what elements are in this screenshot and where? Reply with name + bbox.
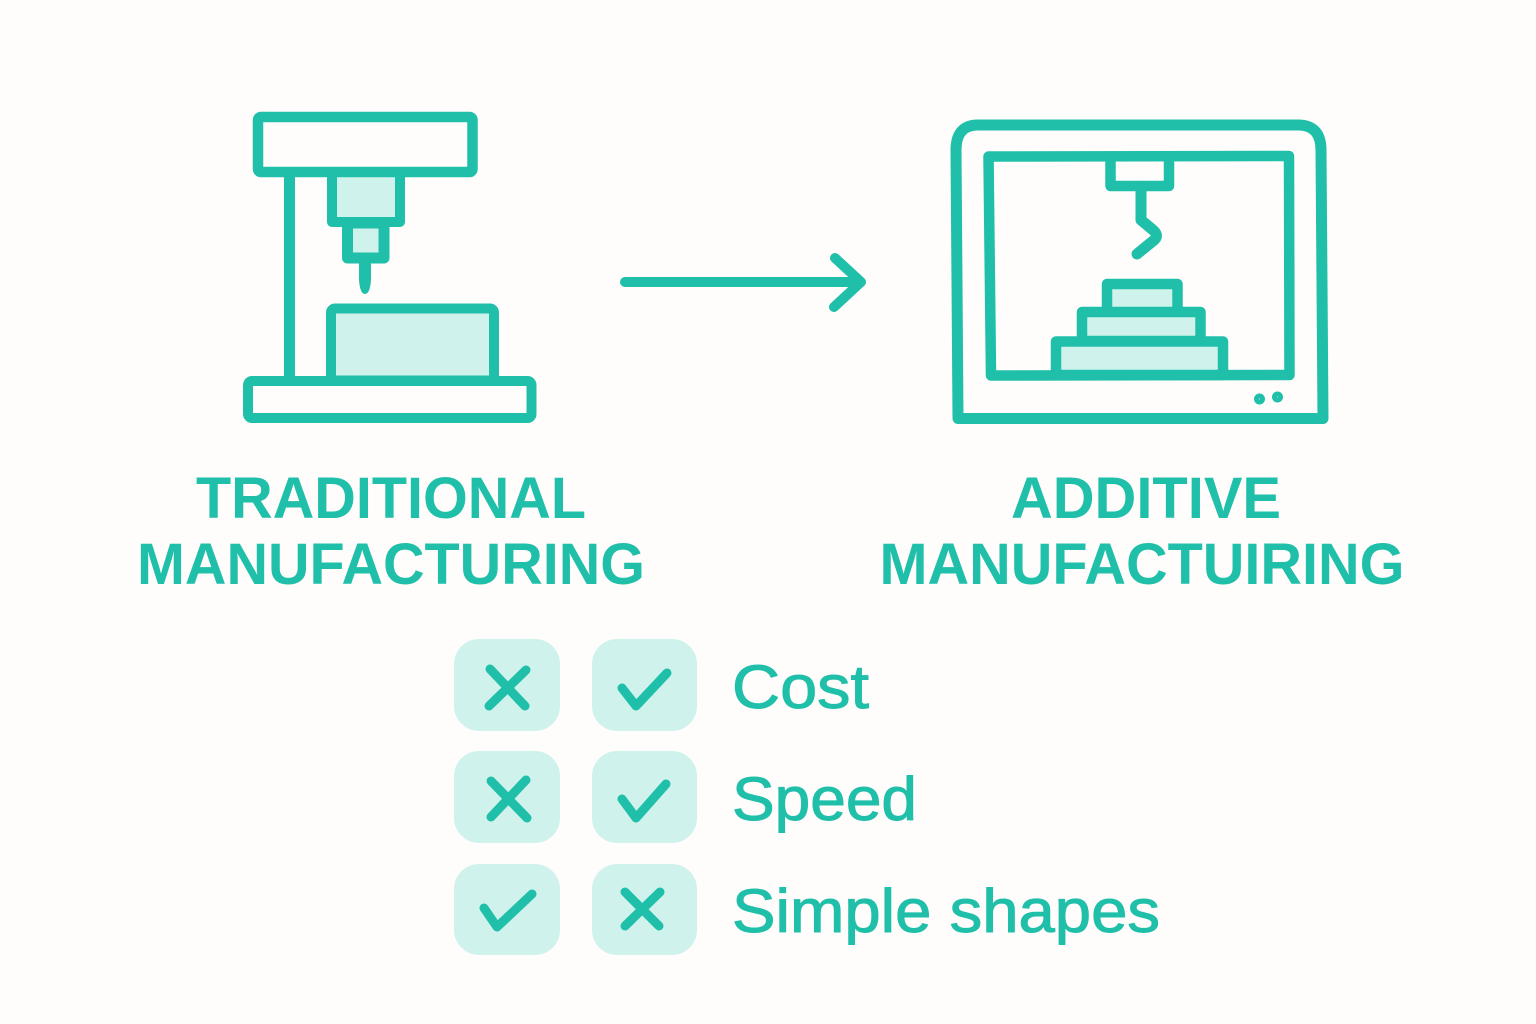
icon: traditional milling machine	[248, 117, 532, 418]
heading: additive manufacturing: ADDITIVE	[1011, 466, 1281, 531]
heading: additive manufacturing: MANUFACTUIRING	[880, 532, 1404, 597]
arrow: traditional to additive	[625, 258, 861, 307]
icon: additive 3D printer	[956, 125, 1323, 418]
comparison row: simple shapes: Simple shapes	[732, 877, 1160, 945]
heading: additive manufacturing	[880, 466, 1404, 597]
heading: traditional manufacturing	[137, 466, 645, 597]
comparison row: cost	[454, 639, 869, 731]
comparison row: simple shapes	[454, 864, 1160, 955]
comparison row: speed	[454, 751, 917, 843]
comparison row: cost: Cost	[732, 653, 869, 721]
heading: traditional manufacturing: TRADITIONAL	[196, 466, 586, 531]
comparison row: speed: Speed	[732, 765, 917, 833]
heading: traditional manufacturing: MANUFACTURING	[137, 532, 645, 597]
